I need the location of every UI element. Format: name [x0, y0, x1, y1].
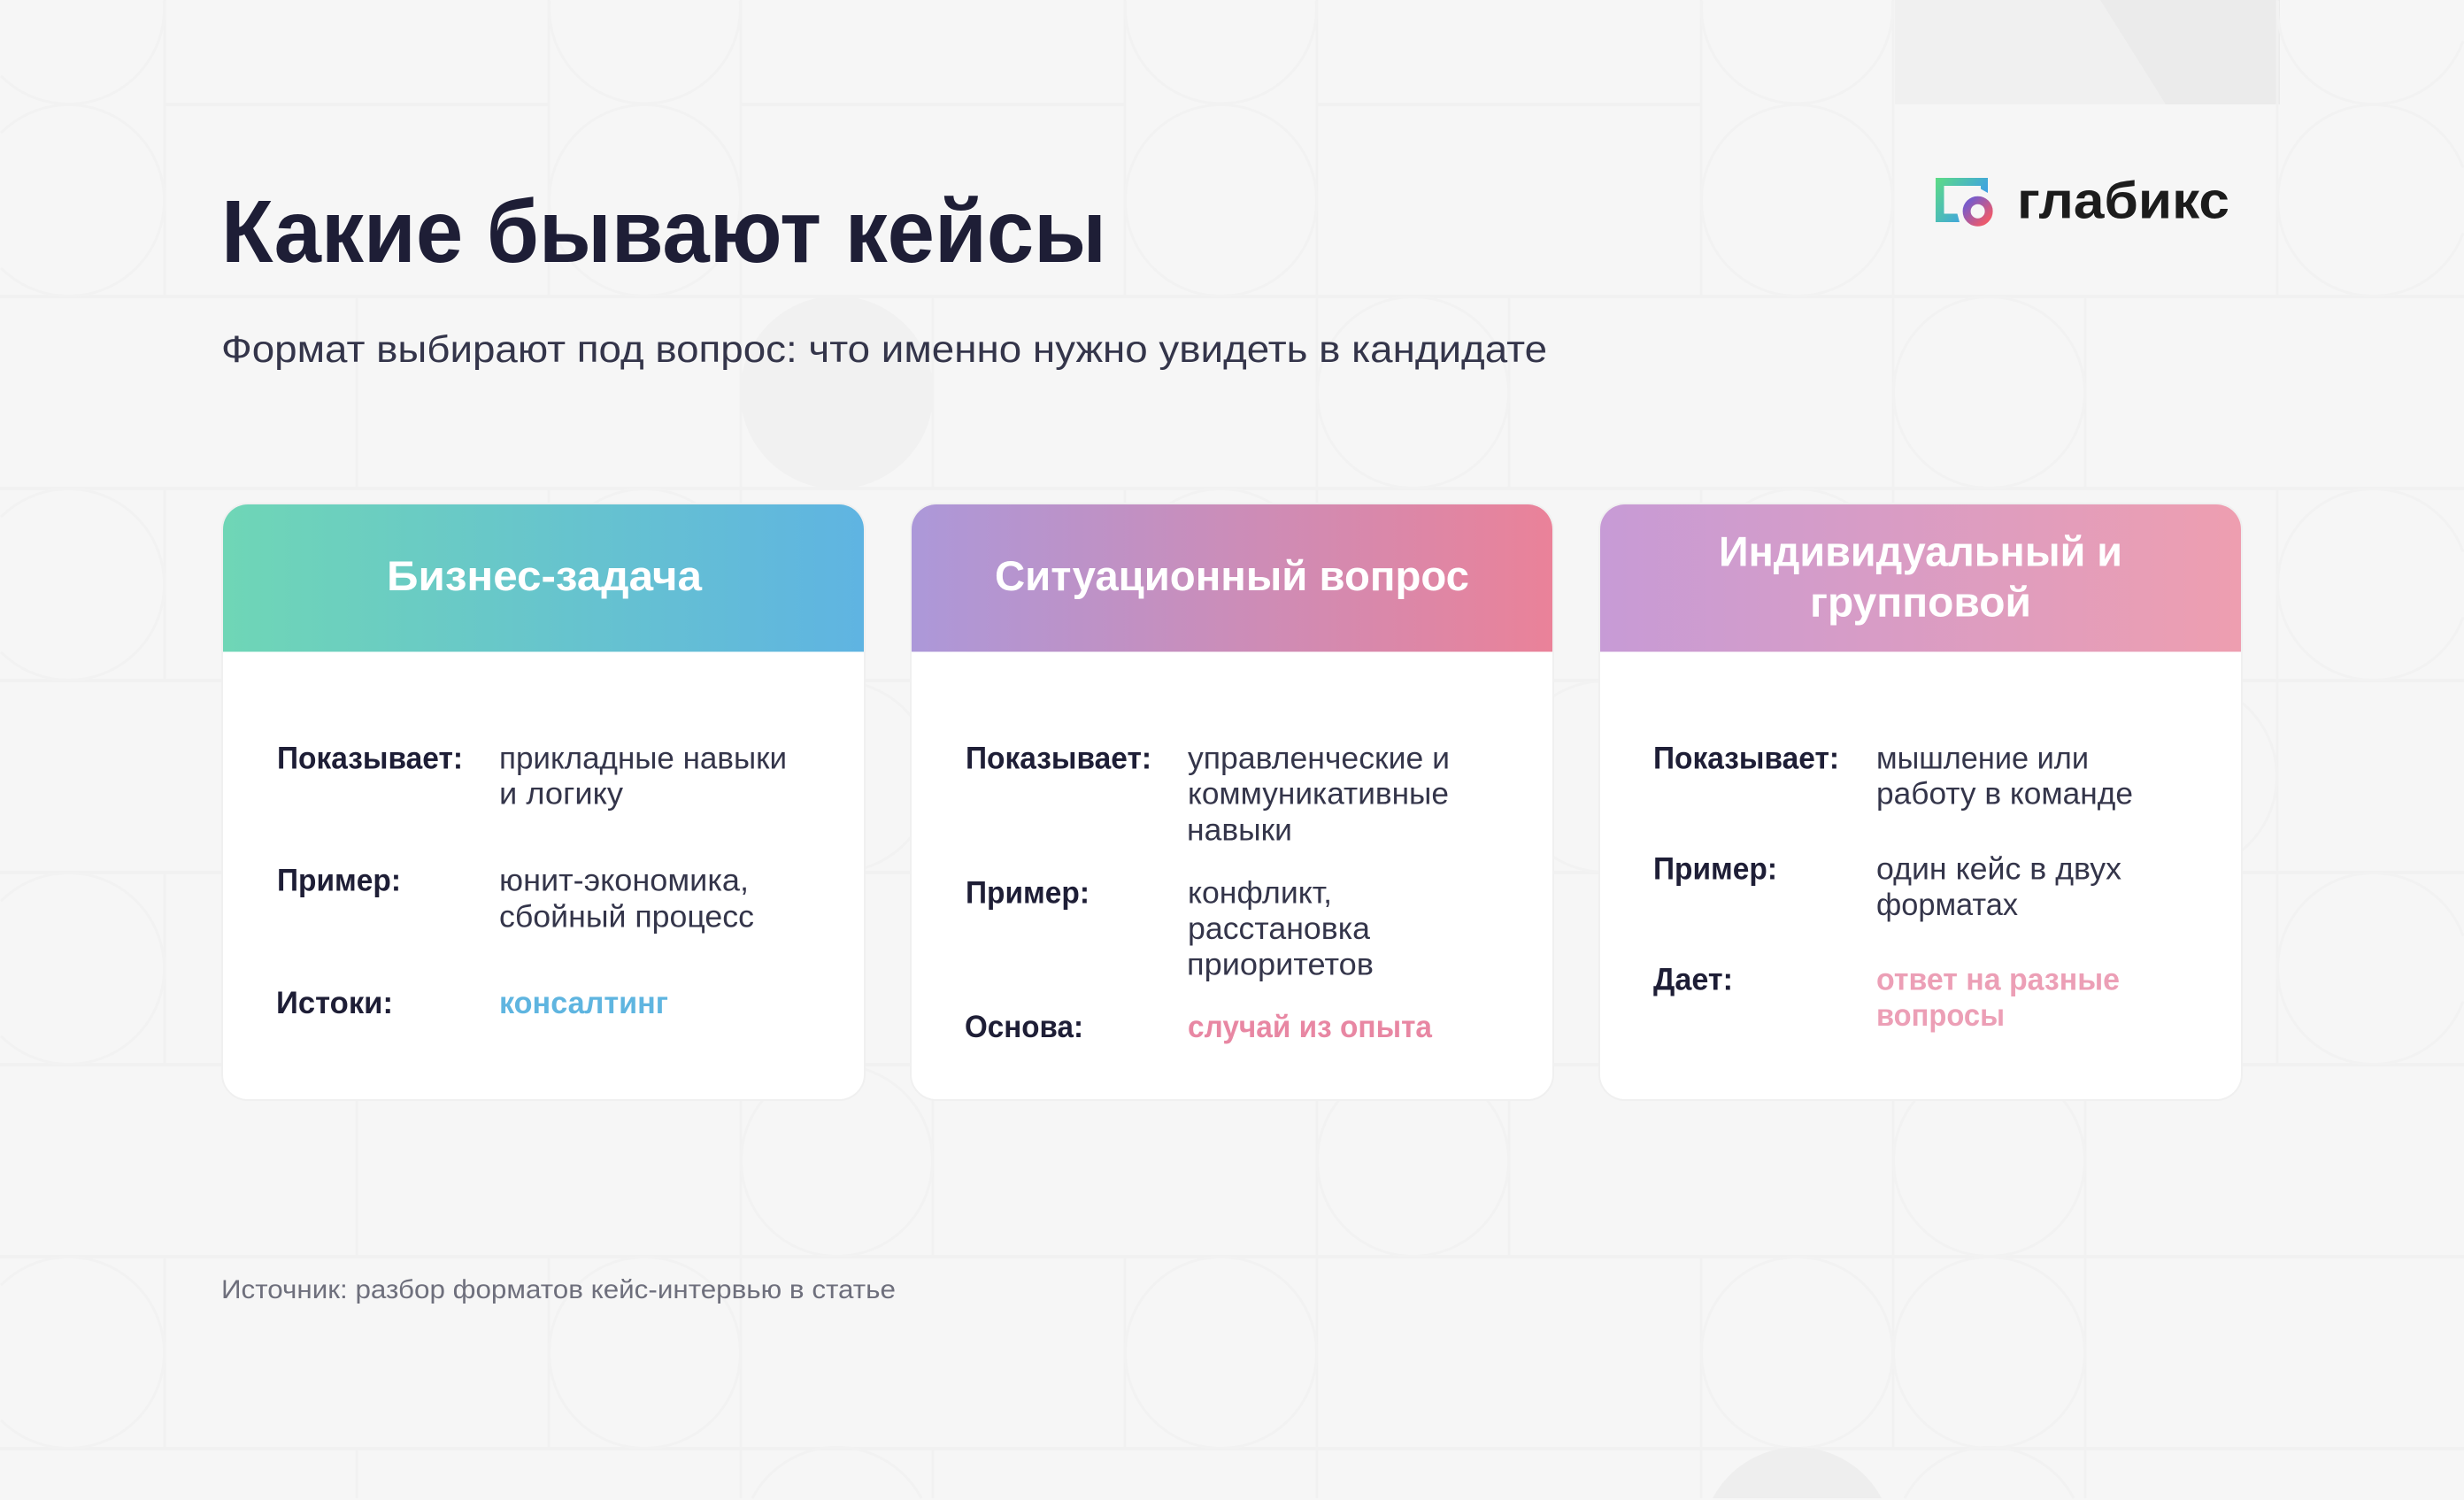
- card header: [912, 504, 1552, 651]
- card heading: групповой: [1810, 579, 2031, 625]
- source note: Источник: разбор форматов кейс-интервью в статье: [221, 1275, 896, 1304]
- row: Пример: расстановка: [1188, 912, 1371, 946]
- icon: logo mark: [1936, 178, 1989, 222]
- card heading: Бизнес-задача: [387, 552, 703, 599]
- row: Дает: вопросы: [1876, 998, 2005, 1033]
- row: Основа: [965, 1010, 1433, 1044]
- row: Показывает: Показывает:: [966, 742, 1151, 775]
- row: Показывает: Показывает:: [277, 742, 463, 775]
- row: Показывает: [966, 742, 1450, 848]
- subtitle: Формат выбирают под вопрос: что именно нужно увидеть в кандидате: [221, 328, 1547, 371]
- row: Показывает: навыки: [1187, 812, 1292, 848]
- panel: Ситуационный вопрос: [911, 504, 1553, 1100]
- card header: [223, 504, 864, 651]
- row: Показывает: [277, 742, 787, 811]
- row: Пример: [1653, 851, 2122, 922]
- card heading: [1719, 527, 2122, 625]
- row: Пример: юнит-экономика,: [499, 864, 749, 897]
- panel: Индивидуальный и групповой: [1599, 504, 2242, 1100]
- row: Показывает: управленческие и: [1188, 742, 1450, 775]
- row: Пример: [277, 864, 754, 935]
- title: Какие бывают кейсы: [221, 182, 1106, 281]
- row: Основа: случай из опыта: [1188, 1010, 1433, 1044]
- row: Показывает: работу в команде: [1876, 777, 2133, 811]
- row: Дает: ответ на разные: [1876, 963, 2120, 996]
- row: Показывает: мышление или: [1876, 742, 2089, 775]
- row: Показывает: [1653, 742, 2133, 811]
- row: Показывает: коммуникативные: [1188, 777, 1449, 811]
- row: Пример: Пример:: [277, 864, 401, 897]
- row: Пример: приоритетов: [1187, 947, 1374, 982]
- row: Пример: Пример:: [966, 876, 1090, 910]
- row: Показывает: и логику: [499, 777, 624, 811]
- card heading: Ситуационный вопрос: [995, 552, 1469, 599]
- row: Пример: конфликт,: [1188, 876, 1332, 910]
- logo wordmark: глабикс: [2017, 172, 2229, 230]
- row: Дает: [1653, 963, 2120, 1033]
- panel: Бизнес-задача: [222, 504, 865, 1100]
- row: Основа: Основа:: [965, 1010, 1083, 1044]
- row: Пример: один кейс в двух: [1876, 851, 2122, 887]
- card heading: Индивидуальный и: [1719, 527, 2122, 575]
- row: Пример: Пример:: [1653, 851, 1777, 887]
- row: Показывает: Показывает:: [1653, 742, 1839, 775]
- row: Пример: сбойный процесс: [499, 899, 754, 935]
- card header: [1600, 504, 2241, 651]
- row: Пример: [966, 876, 1374, 982]
- logo: глабикс: [1936, 172, 2229, 230]
- row: Истоки: Истоки:: [276, 986, 393, 1020]
- row: Истоки: [276, 986, 668, 1020]
- row: Пример: форматах: [1876, 888, 2018, 922]
- row: Дает: Дает:: [1653, 963, 1733, 996]
- row: Истоки: консалтинг: [499, 986, 668, 1020]
- row: Показывает: прикладные навыки: [499, 742, 787, 775]
